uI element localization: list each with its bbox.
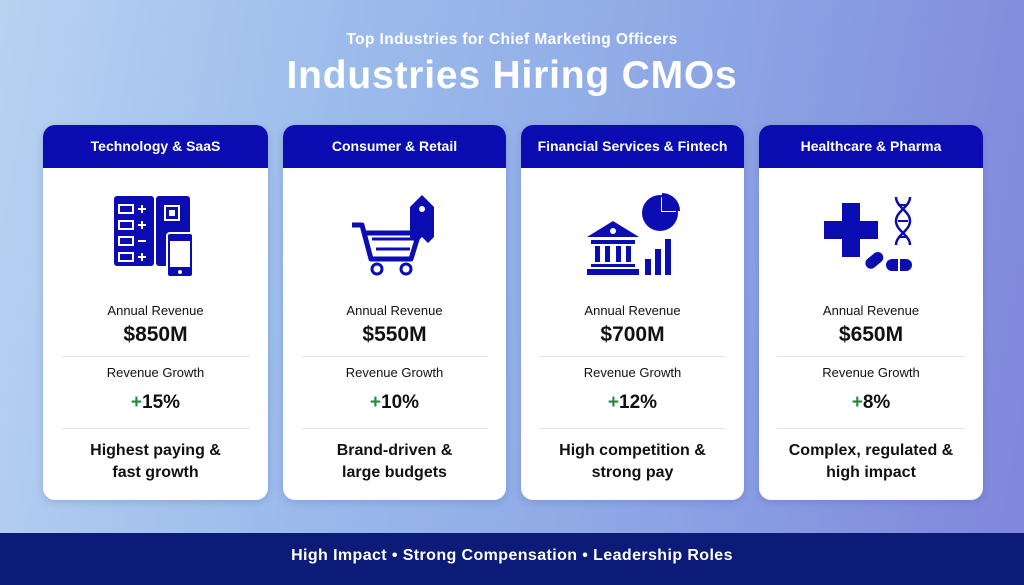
panel: healthcare xyxy=(759,125,983,500)
header: consumer xyxy=(283,125,506,168)
panel: technology: $850M xyxy=(123,323,188,346)
icon: bank with charts xyxy=(587,193,680,275)
panel: financial: Revenue Growth xyxy=(584,365,681,380)
icon: cross, dna, pills xyxy=(824,197,912,271)
header: financial: Financial Services & Fintech xyxy=(538,138,727,154)
header: technology xyxy=(43,125,268,168)
tagline xyxy=(337,442,452,481)
panel: healthcare: Annual Revenue xyxy=(823,303,919,318)
tagline: large budgets xyxy=(342,464,447,481)
panel: consumer xyxy=(283,125,506,500)
footer band: High Impact • Strong Compensation • Leadership Roles xyxy=(291,547,733,564)
tagline xyxy=(789,442,953,481)
panel: consumer: Revenue Growth xyxy=(346,365,443,380)
panel: healthcare: Revenue Growth xyxy=(822,365,920,380)
panel: financial: Annual Revenue xyxy=(584,303,681,318)
panel: financial xyxy=(521,125,744,500)
header: consumer: Consumer & Retail xyxy=(332,138,457,154)
header: financial xyxy=(521,125,744,168)
tagline: Brand-driven & xyxy=(337,442,452,459)
header: technology: Technology & SaaS xyxy=(91,138,220,154)
tagline: high impact xyxy=(826,464,916,481)
tagline: strong pay xyxy=(592,464,673,481)
header: healthcare xyxy=(759,125,983,168)
header: healthcare: Healthcare & Pharma xyxy=(801,138,941,154)
tagline: Complex, regulated & xyxy=(789,442,953,459)
panel: financial: $700M xyxy=(600,323,665,346)
tagline: fast growth xyxy=(112,464,199,481)
panel: technology xyxy=(43,125,268,500)
tagline xyxy=(90,442,221,481)
title: Industries Hiring CMOs xyxy=(286,54,737,97)
icon: cart and tag xyxy=(352,195,434,276)
panel: consumer: +10% xyxy=(370,392,419,413)
annual revenue: Annual Revenue xyxy=(107,303,204,318)
panel: financial: +12% xyxy=(608,392,657,413)
panel: consumer: $550M xyxy=(362,323,427,346)
tagline: High competition & xyxy=(559,442,706,459)
tagline: Highest paying & xyxy=(90,442,221,459)
panel: healthcare: $650M xyxy=(839,323,903,346)
panel: consumer: Annual Revenue xyxy=(346,303,443,318)
subtitle: Top Industries for Chief Marketing Officers xyxy=(346,31,678,48)
tagline xyxy=(559,442,706,481)
panel: healthcare: +8% xyxy=(852,392,890,413)
panel: technology: +15% xyxy=(131,392,180,413)
icon: server and phone xyxy=(114,196,192,276)
footer band xyxy=(0,533,1024,585)
revenue growth: Revenue Growth xyxy=(107,365,204,380)
